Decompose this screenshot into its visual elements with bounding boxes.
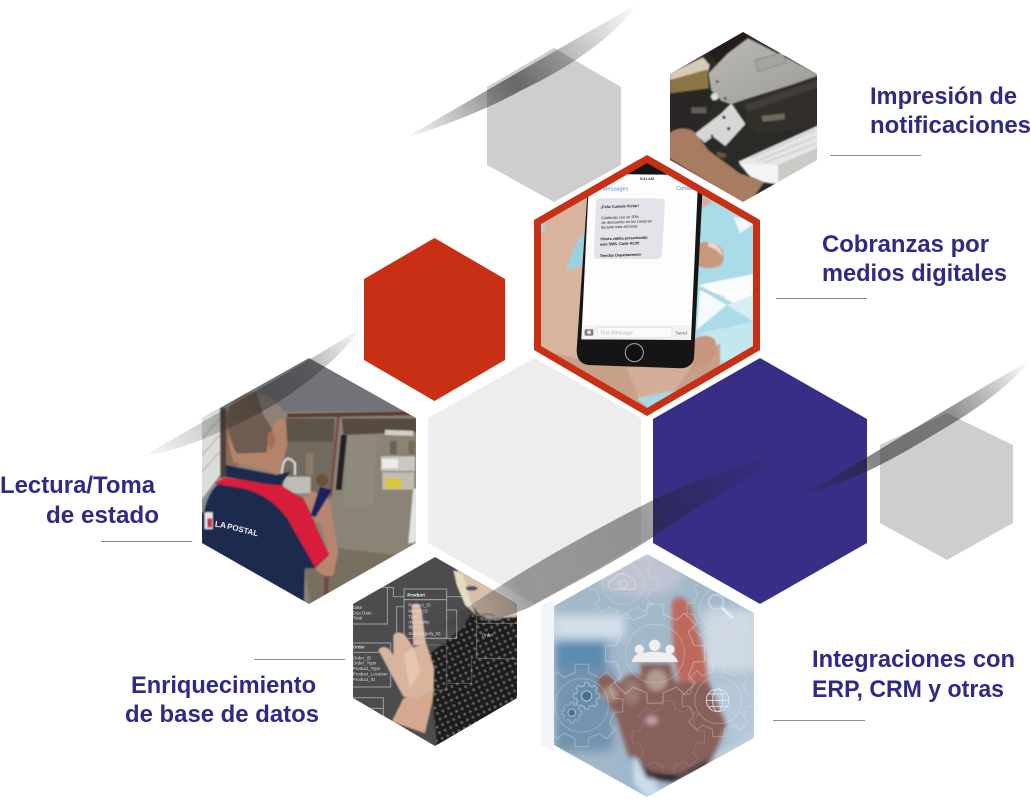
message bubble: Oferta válida presentando — [600, 236, 648, 241]
database tables — [350, 587, 520, 718]
hexagon: navy — [653, 358, 867, 604]
photo background — [530, 153, 763, 417]
message bubble: durante esta semana . — [601, 224, 639, 230]
message bubble — [594, 198, 665, 259]
hexagon: grey right — [880, 413, 1013, 560]
database labels — [353, 592, 502, 706]
woman — [378, 562, 518, 748]
photo hexagon: meter reading — [200, 355, 420, 608]
photo hexagon: database enrichment — [350, 555, 520, 748]
message bubble: este SMS. Code AC30 — [600, 241, 639, 247]
gas meters — [381, 456, 415, 471]
database labels: Availability — [408, 619, 430, 624]
database labels: Product_ID — [353, 677, 376, 682]
label: Lectura/Toma de estado: de estado — [46, 502, 159, 529]
nav bar: Messages — [603, 187, 629, 193]
gears outline — [540, 549, 755, 773]
magnifier icon — [709, 595, 733, 618]
photo hexagon: printing — [668, 30, 820, 205]
label: Lectura/Toma de estado — [0, 472, 159, 529]
people icon — [632, 640, 678, 662]
label: Integraciones con ERP, CRM y otras: ERP, CRM y otras — [812, 676, 1004, 703]
database labels: Date — [353, 605, 363, 610]
label: Cobranzas por medios digitales: Cobranzas por — [822, 231, 989, 258]
message input bar: Text Message — [600, 330, 633, 336]
database labels: Order — [353, 645, 365, 650]
database labels: Order_ID — [353, 655, 372, 660]
photo hexagon: integrations — [540, 549, 760, 802]
database labels: Product_Location — [353, 672, 388, 677]
label: Enriquecimiento de base de datos: de base de datos — [125, 701, 319, 728]
hexagon: light grey centre — [428, 358, 641, 604]
label: Impresión de notificaciones: notificaciones — [870, 112, 1031, 139]
swoosh: centre — [430, 455, 790, 632]
hexagon: red — [364, 238, 505, 401]
database labels: Due Date — [353, 610, 372, 615]
swoosh: top — [407, 3, 639, 137]
wall interior — [280, 437, 334, 498]
hexagon: grey top — [487, 48, 621, 202]
man: shirt — [202, 483, 324, 602]
database labels: Product_ID — [408, 603, 432, 608]
shirt logo text: POSTAL — [226, 522, 259, 538]
phone screen — [581, 174, 698, 340]
awning — [222, 358, 404, 412]
phone body — [577, 160, 703, 368]
message input bar: Send — [675, 331, 687, 337]
shirt logo text — [215, 521, 258, 536]
database labels: Product_Type — [353, 666, 381, 671]
database labels: Status — [408, 624, 422, 629]
envelopes — [697, 217, 753, 363]
label: Cobranzas por medios digitales — [822, 231, 1007, 287]
photo hexagon: phone with SMS — [530, 153, 763, 417]
pale left strip — [541, 600, 554, 752]
globe icon — [706, 689, 729, 712]
database labels: Ship — [353, 701, 363, 706]
message bubble: Tiendas Departamento — [600, 253, 642, 258]
database labels: Total — [353, 616, 362, 621]
database labels: Customer — [482, 617, 502, 622]
label: Impresión de notificaciones — [870, 83, 1031, 139]
hexagon red outline — [538, 159, 756, 412]
message input bar — [582, 325, 690, 339]
database labels: Subcategory_ID — [408, 631, 441, 636]
database labels: Product — [407, 592, 425, 597]
swoosh: left — [143, 327, 363, 456]
cloud icon — [608, 574, 635, 589]
label: Lectura/Toma de estado: Lectura/Toma — [0, 472, 156, 499]
database labels: Order — [482, 633, 494, 638]
shirt logo text: LA — [214, 519, 227, 530]
window — [200, 408, 220, 502]
label: Enriquecimiento de base de datos — [125, 672, 319, 728]
database labels: Order_Type — [353, 661, 377, 666]
label: Integraciones con ERP, CRM y otras — [812, 646, 1015, 703]
label: Integraciones con ERP, CRM y otras: Integraciones con — [812, 646, 1015, 673]
gear icons — [562, 683, 600, 723]
man: arm and phone — [315, 514, 338, 576]
home button — [625, 344, 643, 362]
message bubble: de descuento en tus compras — [601, 219, 652, 225]
status bar text: 9:41 AM — [640, 177, 654, 181]
swoosh: right — [800, 360, 1031, 495]
message bubble: Celébralo con un 30% — [601, 215, 640, 220]
database labels: Manuf_ID — [408, 608, 429, 613]
message bubble: ¡Feliz Cumple Victor! — [601, 204, 639, 209]
photo hexagon: phone with SMS: Contact — [676, 186, 696, 192]
label: Cobranzas por medios digitales: medios digitales — [822, 260, 1007, 287]
database labels: Type — [408, 614, 419, 619]
label: Enriquecimiento de base de datos: Enriquecimiento — [131, 672, 316, 699]
hand — [533, 193, 724, 415]
label: Impresión de notificaciones: Impresión de — [870, 83, 1017, 110]
man: head — [228, 405, 288, 475]
